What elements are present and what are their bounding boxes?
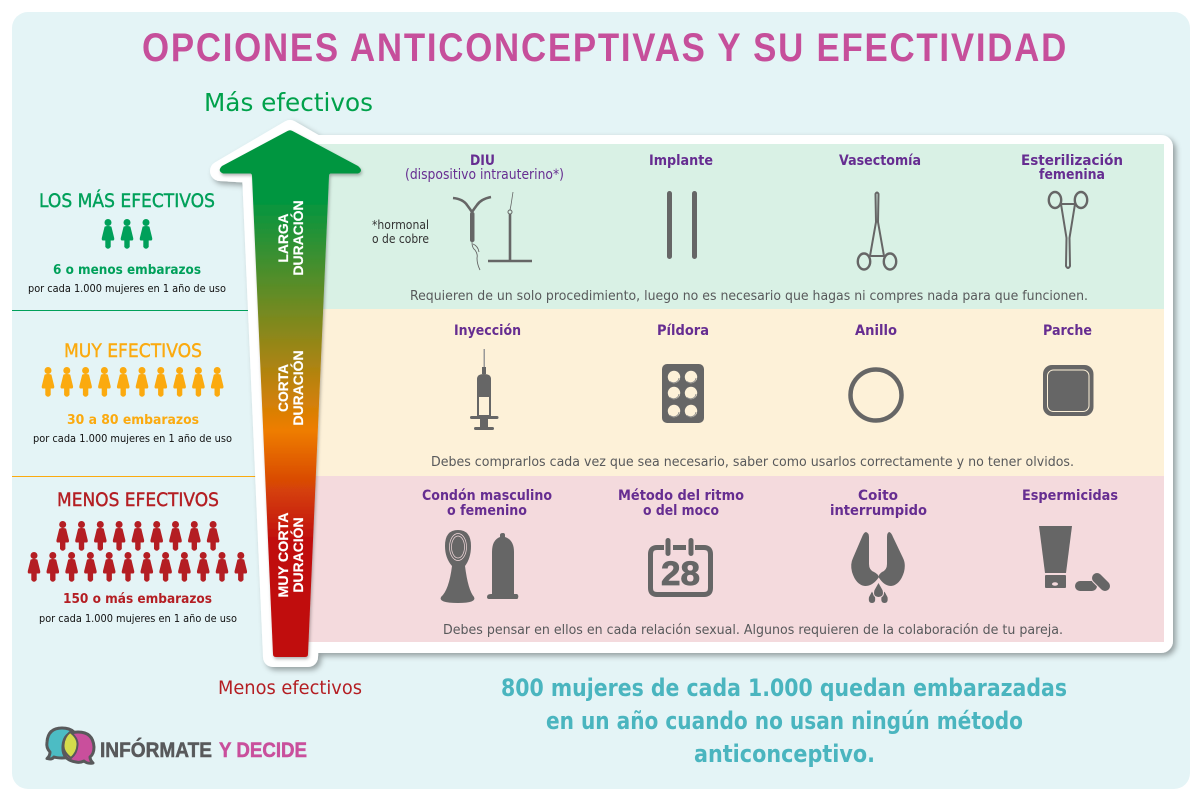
icons: 3 women — [102, 219, 152, 249]
description: very short duration: Debes pensar en ellos en cada relación sexual. Algunos requieren de la colaboración de tu pareja. — [443, 623, 1063, 638]
method: ritmo o moco — [618, 488, 744, 594]
method: vasectomía — [839, 153, 921, 270]
note: *hormonal — [372, 218, 429, 232]
method: esterilización femenina — [1021, 153, 1123, 268]
icon: capsules — [1080, 578, 1105, 586]
panel: effectiveness summary, most effective — [28, 189, 226, 295]
icons: 10 women — [42, 367, 223, 397]
callout: 800 mujeres — [501, 674, 1067, 768]
heading: DIU — [470, 153, 495, 169]
note: o de cobre — [372, 232, 429, 246]
icon: pill pack — [662, 364, 704, 423]
heading line 2: femenina — [1039, 167, 1105, 183]
heading: Coito — [858, 488, 898, 504]
icon: implant rods — [667, 191, 697, 259]
description: short duration: Debes comprarlos cada vez que sea necesario, saber como usarlos correctamente y no tener olvidos. — [431, 455, 1074, 470]
method: píldora — [657, 323, 709, 423]
icon: forceps pointing down — [1049, 192, 1087, 268]
arrow label: corta duración — [275, 350, 306, 426]
icon: syringe — [470, 349, 498, 430]
arrow label: muy corta duración: MUY CORTA — [275, 512, 291, 598]
heading line 2: o femenino — [447, 503, 527, 519]
arrow: effectiveness gradient — [220, 130, 361, 657]
heading: Espermicidas — [1022, 488, 1118, 504]
white card behind methods and arrow — [220, 130, 1173, 657]
method: parche — [1043, 323, 1094, 416]
logo: Infórmate y decide — [47, 728, 307, 763]
subheading: (dispositivo intrauterino*) — [405, 167, 564, 183]
method: inyección — [454, 323, 521, 430]
note: por cada 1.000 mujeres en 1 año de uso — [33, 432, 232, 445]
callout: 800 mujeres: en un año cuando no usan ningún método — [546, 707, 1023, 735]
icon: hormonal IUD — [453, 197, 491, 270]
icon: withdrawal — [851, 532, 905, 604]
logo text: INFÓRMATE — [100, 738, 212, 762]
heading: menos efectivos: MENOS EFECTIVOS — [57, 489, 219, 511]
heading: Vasectomía — [839, 153, 921, 169]
arrow label: muy corta duración — [275, 512, 306, 598]
note: por cada 1.000 mujeres en 1 año de uso — [28, 282, 226, 295]
icon: ring — [850, 370, 902, 420]
heading: Condón masculino — [422, 488, 552, 504]
icons: 21 women — [28, 521, 247, 582]
title: OPCIONES ANTICONCEPTIVAS Y SU EFECTIVIDAD — [142, 26, 1068, 70]
note: por cada 1.000 mujeres en 1 año de uso — [39, 612, 237, 625]
heading: Anillo — [855, 323, 897, 339]
icon: female condom — [441, 530, 474, 603]
arrow label: larga duración — [275, 200, 306, 276]
row: short duration background — [300, 309, 1164, 476]
method: espermicidas — [1022, 488, 1118, 588]
icon: copper IUD — [488, 192, 532, 261]
heading: Inyección — [454, 323, 521, 339]
panel: effectiveness summary, less effective — [28, 489, 247, 625]
logo icon: speech bubbles — [47, 728, 94, 763]
heading: Píldora — [657, 323, 709, 339]
method: implante — [649, 153, 713, 259]
heading: muy efectivos: MUY EFECTIVOS — [64, 340, 202, 362]
logo text accent: Y DECIDE — [219, 739, 307, 762]
callout: 800 mujeres: 800 mujeres de cada 1.000 quedan embarazadas — [501, 674, 1067, 702]
heading: Parche — [1043, 323, 1092, 339]
method: coito interrumpido — [830, 488, 927, 604]
description: long duration: Requieren de un solo procedimiento, luego no es necesario que hagas ni compres nada para que funcionen. — [410, 289, 1088, 304]
heading: Esterilización — [1021, 153, 1123, 169]
row: very short duration background — [300, 476, 1164, 642]
method: anillo — [850, 323, 902, 420]
icon: tube — [1039, 526, 1072, 588]
label: menos efectivos: Menos efectivos — [218, 677, 362, 699]
icon: male condom — [487, 533, 518, 599]
label: más efectivos: Más efectivos — [204, 88, 373, 117]
icon: patch — [1043, 365, 1094, 416]
stat: 150 o más embarazos: 150 o más embarazos — [63, 591, 212, 607]
method: DIU — [372, 153, 564, 270]
heading: Método del ritmo — [618, 488, 744, 504]
arrow label: corta duración: DURACIÓN — [289, 350, 306, 426]
arrow label: muy corta duración: DURACIÓN — [289, 518, 306, 592]
heading: Implante — [649, 153, 713, 169]
heading line 2: o del moco — [643, 503, 719, 519]
icon: calendar: 28 — [661, 555, 700, 593]
heading: los más efectivos: LOS MÁS EFECTIVOS — [39, 189, 215, 212]
icon: forceps pointing up — [858, 192, 896, 270]
panel: effectiveness summary, very effective — [33, 340, 232, 445]
arrow label: larga duración: DURACIÓN — [289, 200, 306, 276]
heading line 2: interrumpido — [830, 503, 927, 519]
arrow label: corta duración: CORTA — [275, 364, 291, 412]
row: long duration background — [300, 144, 1164, 309]
method: condón — [422, 488, 552, 603]
callout: 800 mujeres: anticonceptivo. — [694, 740, 875, 768]
stat: 30 a 80 embarazos: 30 a 80 embarazos — [67, 412, 199, 428]
arrow label: larga duración: LARGA — [275, 214, 291, 262]
stat: 6 o menos embarazos: 6 o menos embarazos — [53, 262, 201, 278]
